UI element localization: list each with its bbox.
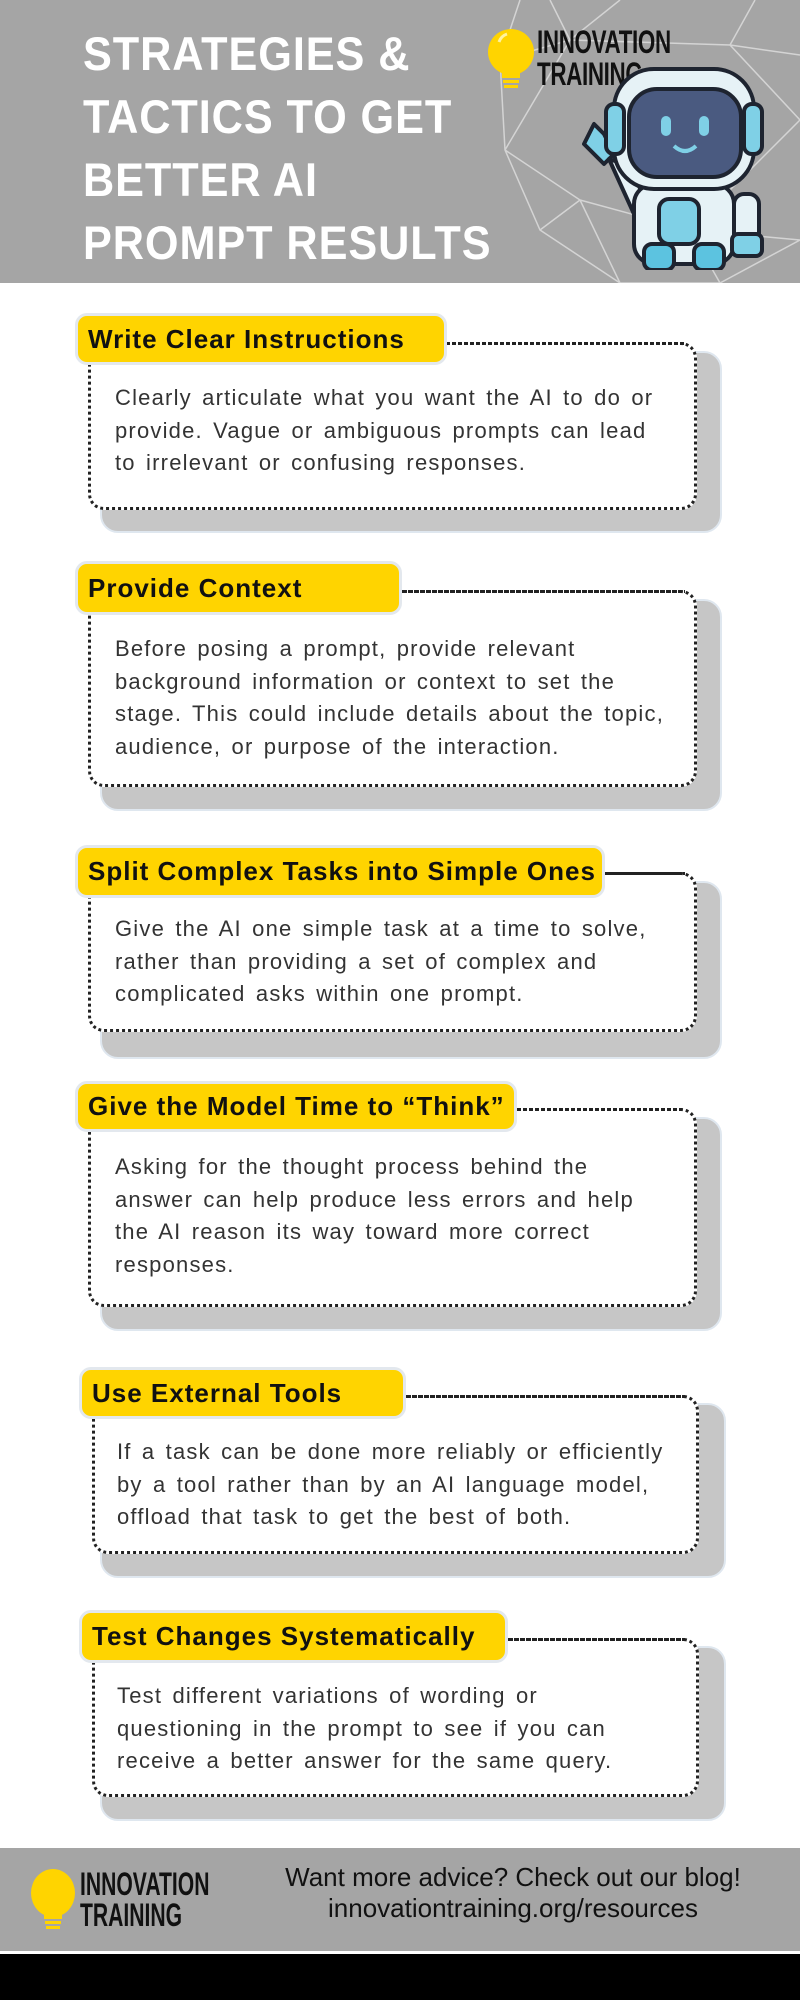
heading — [79, 1367, 406, 1419]
heading — [75, 845, 605, 898]
heading: Write Clear Instructions — [88, 324, 405, 354]
footer text — [285, 1862, 741, 1923]
text — [115, 385, 653, 475]
card 1: write clear instructions — [75, 313, 722, 533]
heading — [79, 1610, 508, 1663]
heading — [75, 561, 402, 615]
text: If a task can be done more reliably or efficiently — [117, 1439, 663, 1464]
text: the AI reason its way toward more correct — [115, 1219, 590, 1244]
card 5: use external tools — [79, 1367, 726, 1578]
bottom bar — [0, 1954, 800, 2000]
logo: header — [488, 24, 671, 92]
footer — [0, 1848, 800, 1951]
logo: footer: INNOVATION — [80, 1866, 209, 1902]
header background — [0, 0, 800, 283]
text: background information or context to set the — [115, 668, 615, 694]
heading: Give the Model Time to “Think” — [88, 1091, 505, 1121]
text — [115, 636, 664, 758]
icon: bulb — [488, 29, 534, 88]
text: Give the AI one simple task at a time to solve, — [115, 916, 647, 941]
geodesic pattern — [500, 0, 800, 283]
footer text: innovationtraining.org/resources — [328, 1893, 698, 1923]
card 3: split complex tasks — [75, 845, 722, 1059]
text — [117, 1439, 663, 1529]
text: Test different variations of wording or — [117, 1683, 538, 1708]
card 2: provide context — [75, 561, 722, 811]
text — [115, 1154, 634, 1276]
text: answer can help produce less errors and help — [115, 1186, 634, 1212]
footer text: Want more advice? Check out our blog! — [285, 1862, 741, 1892]
text: responses. — [115, 1252, 235, 1276]
logo: header: INNOVATION — [537, 24, 671, 60]
text: Asking for the thought process behind the — [115, 1154, 588, 1179]
text: stage. This could include details about the topic, — [115, 701, 664, 726]
heading: Provide Context — [88, 572, 302, 602]
text: provide. Vague or ambiguous prompts can lead — [115, 418, 646, 442]
text: by a tool rather than by an AI language model, — [117, 1472, 649, 1496]
text: questioning in the prompt to see if you can — [117, 1716, 606, 1740]
heading: Split Complex Tasks into Simple Ones — [88, 856, 596, 886]
text: Before posing a prompt, provide relevant — [115, 636, 575, 661]
icon: robot — [582, 67, 764, 270]
logo: header: TRAINING — [537, 56, 642, 92]
logo: footer: TRAINING — [80, 1897, 182, 1933]
title — [83, 27, 491, 269]
card 4: give model time to think — [75, 1081, 722, 1331]
card 6: test changes systematically — [79, 1610, 726, 1821]
heading — [75, 313, 447, 365]
text: receive a better answer for the same query. — [117, 1748, 612, 1773]
text: audience, or purpose of the interaction. — [115, 734, 560, 758]
title: BETTER AI — [83, 153, 318, 206]
text — [117, 1683, 612, 1773]
text: rather than providing a set of complex and — [115, 948, 597, 974]
heading — [75, 1081, 517, 1132]
text — [115, 916, 647, 1006]
text: to irrelevant or confusing responses. — [115, 450, 526, 475]
logo: footer — [31, 1866, 209, 1933]
heading: Test Changes Systematically — [92, 1621, 475, 1651]
title: PROMPT RESULTS — [83, 216, 491, 269]
title: STRATEGIES & — [83, 27, 410, 80]
text: Clearly articulate what you want the AI to do or — [115, 385, 653, 410]
text: complicated asks within one prompt. — [115, 981, 524, 1006]
heading: Use External Tools — [92, 1378, 342, 1408]
text: offload that task to get the best of both. — [117, 1504, 571, 1529]
title: TACTICS TO GET — [83, 90, 452, 143]
